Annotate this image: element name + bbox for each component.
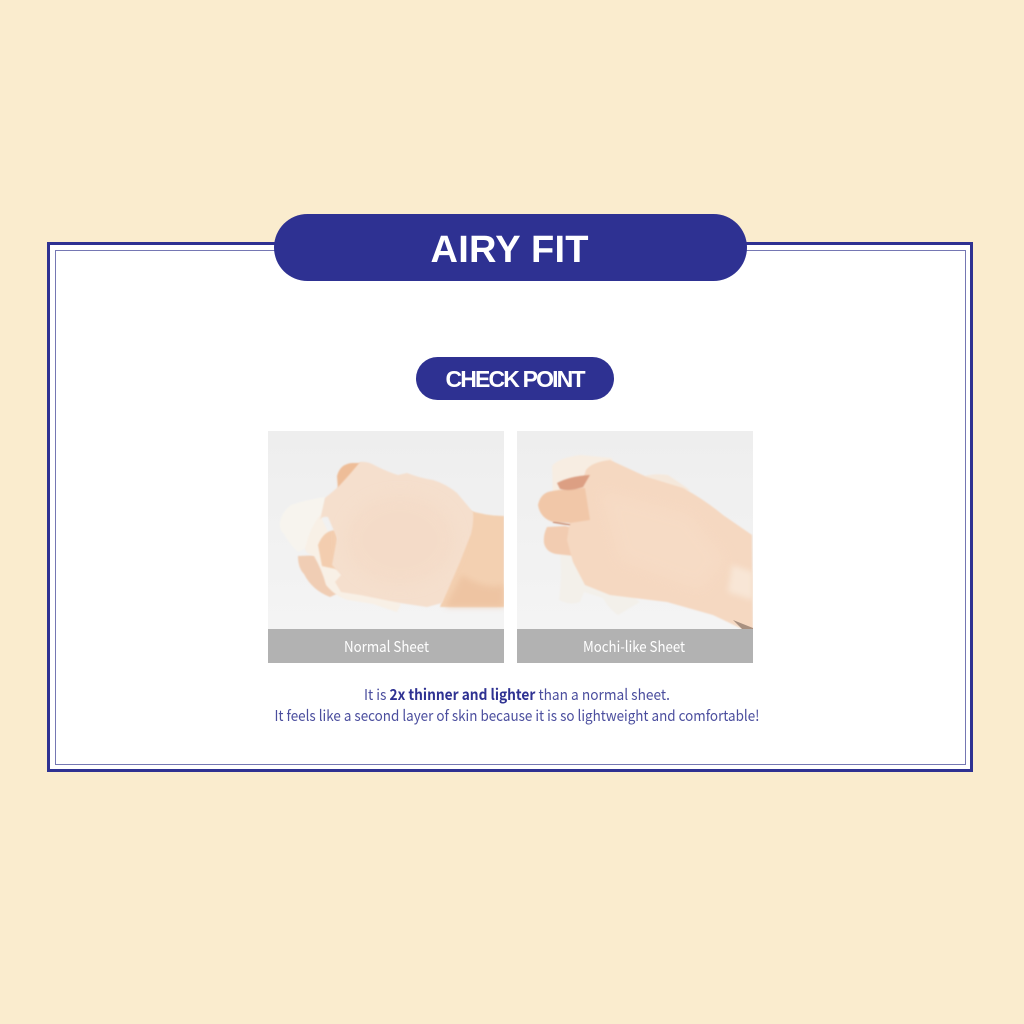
- caption bar: normal sheet: [268, 629, 504, 663]
- finger crease: [553, 522, 570, 525]
- check point badge: CHECK POINT: [446, 366, 586, 392]
- check point badge: [416, 357, 614, 400]
- arm shadow: [733, 620, 753, 629]
- forearm: [440, 510, 504, 607]
- photo: mochi-like sheet: [517, 431, 753, 640]
- loose sheet flap: [280, 497, 325, 552]
- lower sheet strip: [305, 515, 401, 612]
- fingernail: [557, 475, 590, 490]
- title pill: AIRY FIT: [430, 229, 588, 271]
- upper finger: [538, 488, 590, 523]
- hand shading: [600, 490, 725, 590]
- panel: airy fit frame: [48, 244, 972, 770]
- exposed knuckle: [337, 463, 362, 490]
- photo: normal sheet: [268, 431, 504, 629]
- exposed finger: [318, 530, 338, 570]
- sheet tone: [345, 495, 455, 585]
- lower finger: [543, 526, 572, 556]
- caption bar: mochi-like sheet: Mochi-like Sheet: [583, 636, 685, 657]
- lower sheet flap: [560, 564, 638, 614]
- caption bar: mochi-like sheet: [517, 629, 753, 663]
- title pill: [274, 214, 747, 281]
- wrist gel: [728, 565, 753, 600]
- right sheet flap: [646, 474, 689, 490]
- wrist shading: [445, 575, 504, 607]
- description text: [274, 684, 760, 726]
- description text: It is 2x thinner and lighter than a normal sheet.: [364, 684, 670, 705]
- main sheet over hand: [320, 462, 473, 607]
- description text: It feels like a second layer of skin because it is so lightweight and comfortable!: [274, 705, 760, 726]
- top sheet flap: [552, 456, 612, 490]
- hand: [567, 460, 753, 634]
- caption bar: normal sheet: Normal Sheet: [344, 636, 429, 657]
- lower finger: [297, 555, 336, 598]
